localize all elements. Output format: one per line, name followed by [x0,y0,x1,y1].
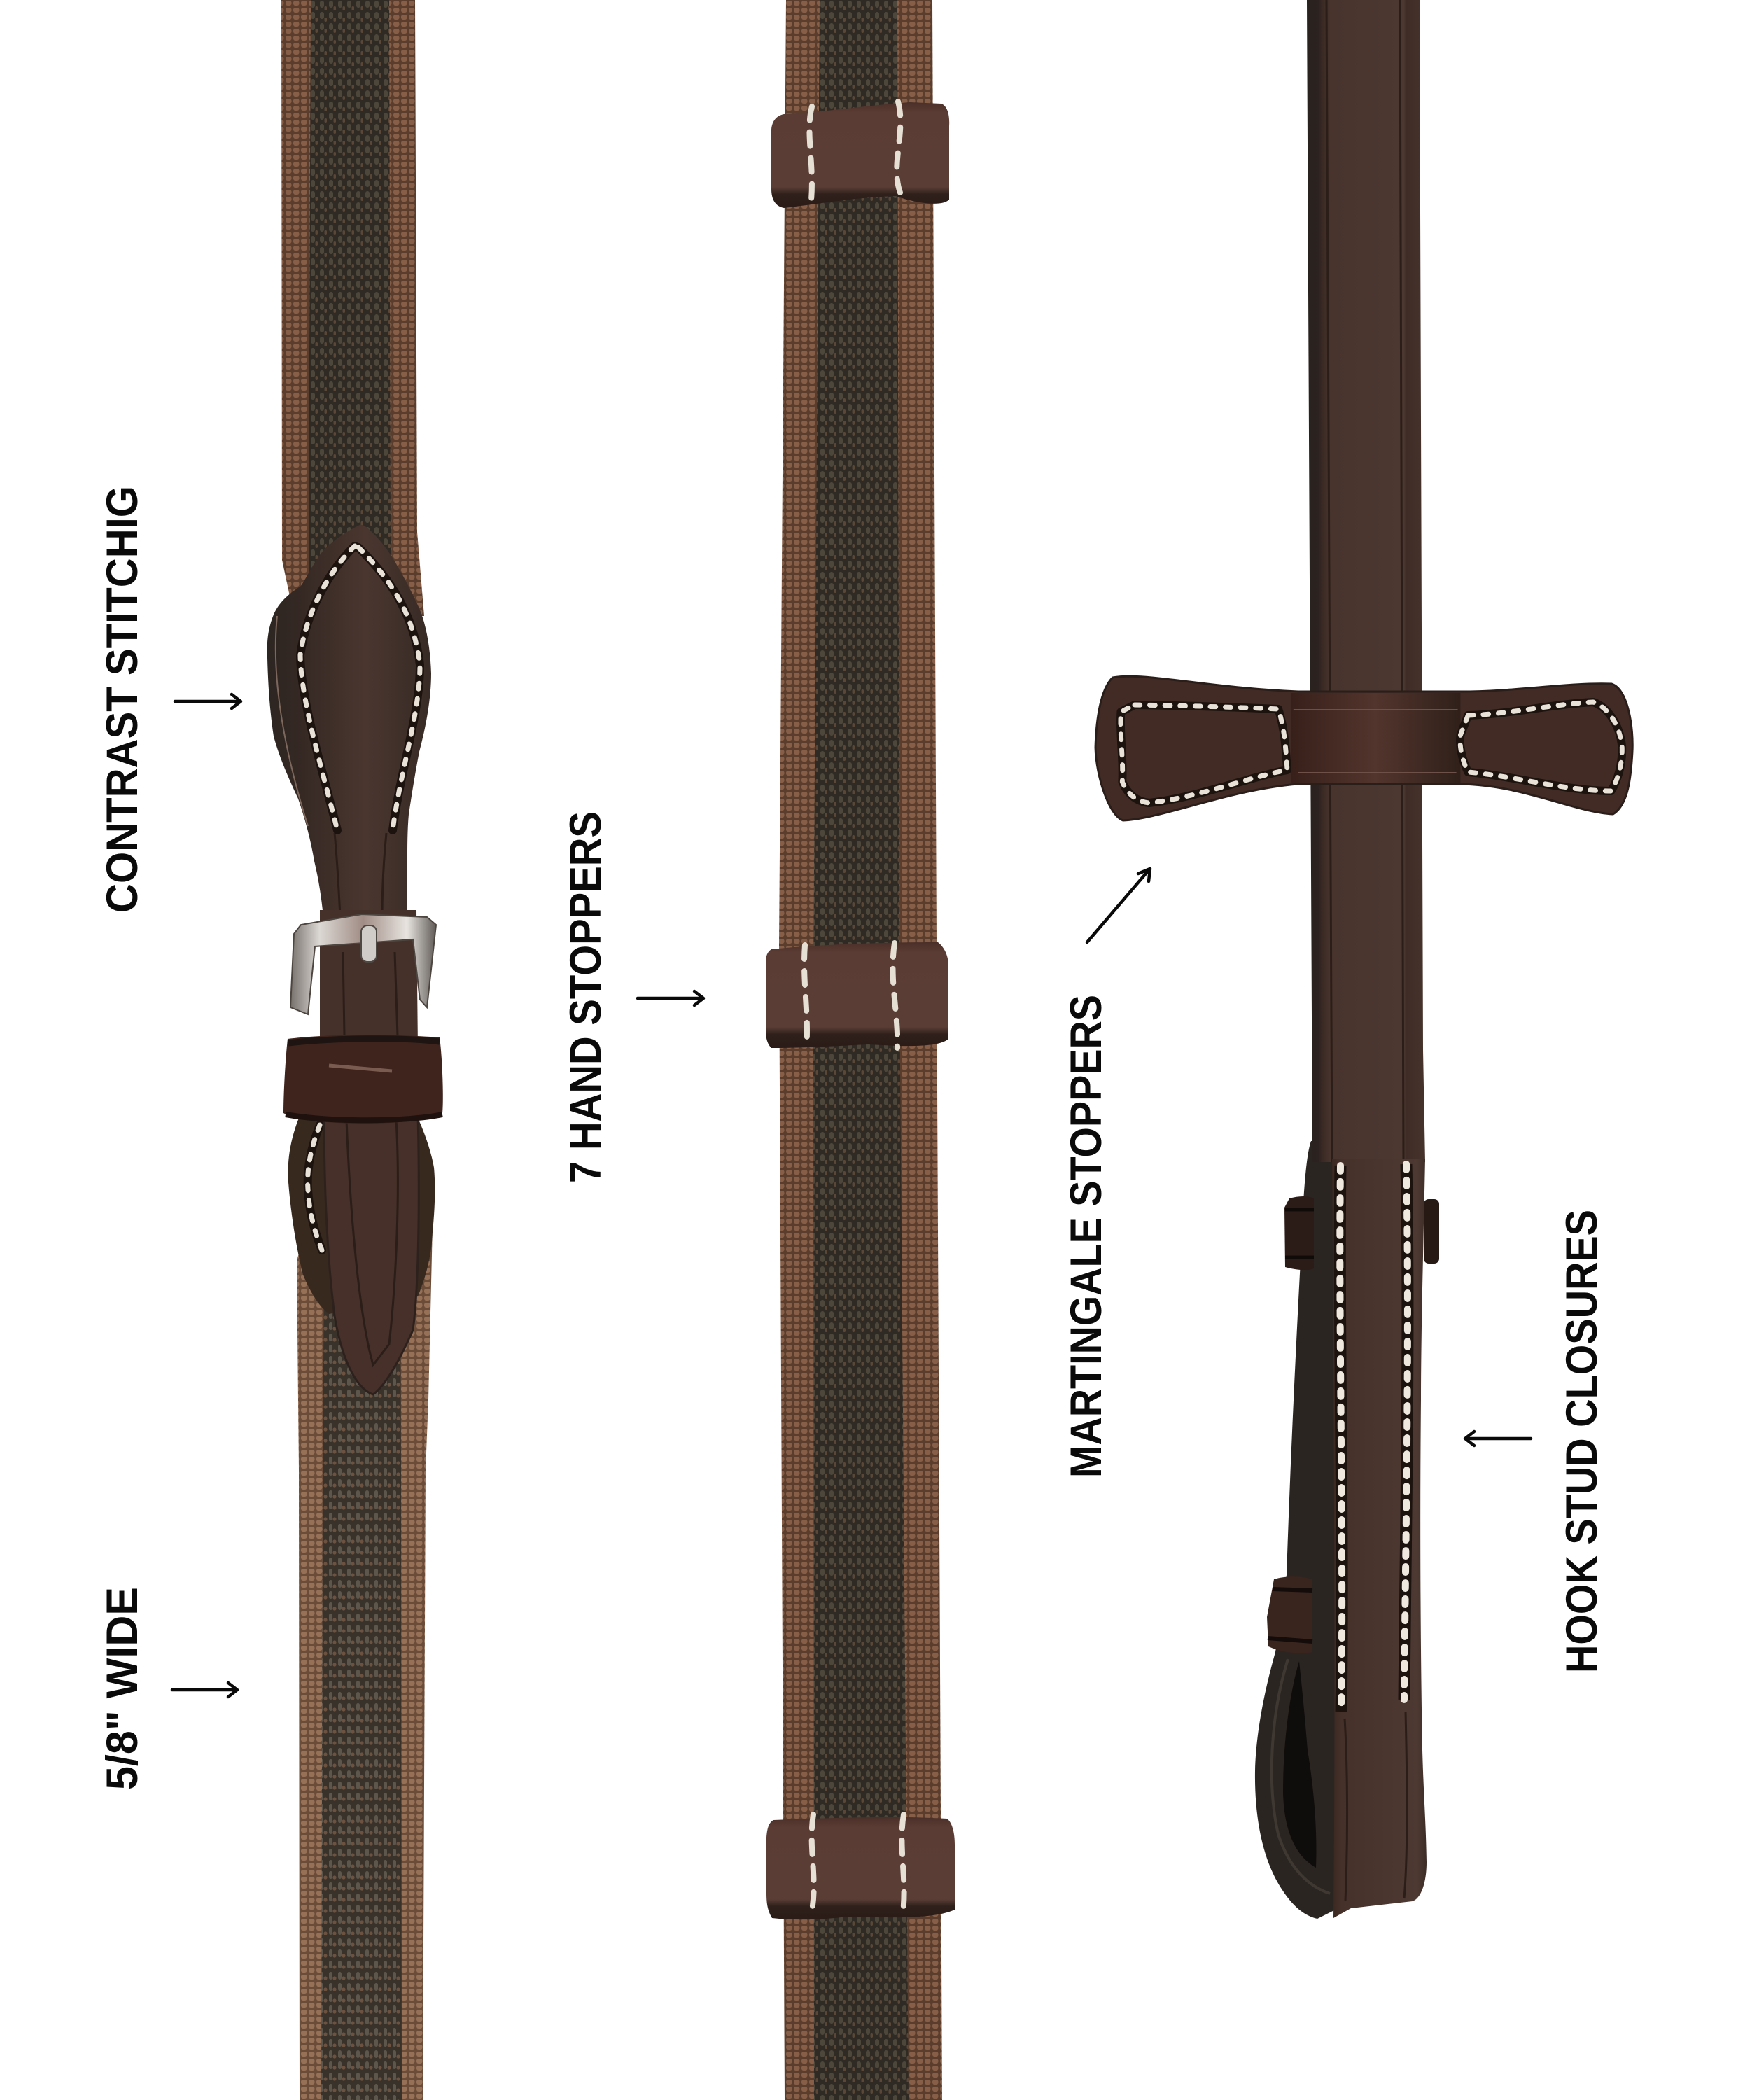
partial stitching by keeper [308,1125,322,1250]
leather leaf keeper [267,525,431,917]
webbing: brown edges [779,0,942,2100]
main leather strap [1307,0,1425,1162]
top stopper loop [1284,1196,1439,1270]
lower layered section [1332,1158,1427,1918]
strap 3: leather rein with martingale stopper and hook stud end [1096,0,1632,1919]
hand stopper 3 [766,1814,955,1919]
arrow: contrast stitching [175,694,241,708]
stopper stitching [1121,702,1622,803]
leather strap through buckle [320,910,418,1050]
strap 1: webbing rein with buckle [267,0,443,2100]
arrow: 7 hand stoppers [638,991,704,1005]
arrow: 5/8 wide [172,1683,237,1697]
stitching on leaf keeper [300,546,420,830]
leather under-piece behind tip [288,1118,435,1314]
strap 2: webbing rein with hand stoppers [766,0,955,2100]
martingale stopper [1096,676,1632,820]
label: contrast stitching: CONTRAST STITCHIG [98,486,147,913]
leather pointed tip [324,1113,419,1394]
centre band of stopper [1291,693,1460,783]
back strap and loop [1255,1141,1338,1919]
webbing: dark centre [813,0,909,2100]
label: martingale stoppers: MARTINGALE STOPPERS [1062,995,1111,1478]
arrow: martingale stoppers [1087,869,1150,942]
label: hook stud closures: HOOK STUD CLOSURES [1558,1210,1606,1673]
keeper loop [284,1035,443,1124]
webbing: upper section [281,0,424,616]
lower stopper loop [1267,1576,1312,1653]
hand stopper 1 [771,102,949,208]
loop opening [1283,1661,1316,1868]
label: 7 hand stoppers: 7 HAND STOPPERS [561,811,610,1183]
webbing: lower section [297,1225,433,2100]
stitching on lower strap [1340,1164,1408,1712]
arrow: hook stud closures [1465,1432,1531,1446]
hand stopper 2 [766,942,948,1048]
buckle [290,914,436,1014]
label: 5/8 wide: 5/8" WIDE [98,1587,147,1790]
